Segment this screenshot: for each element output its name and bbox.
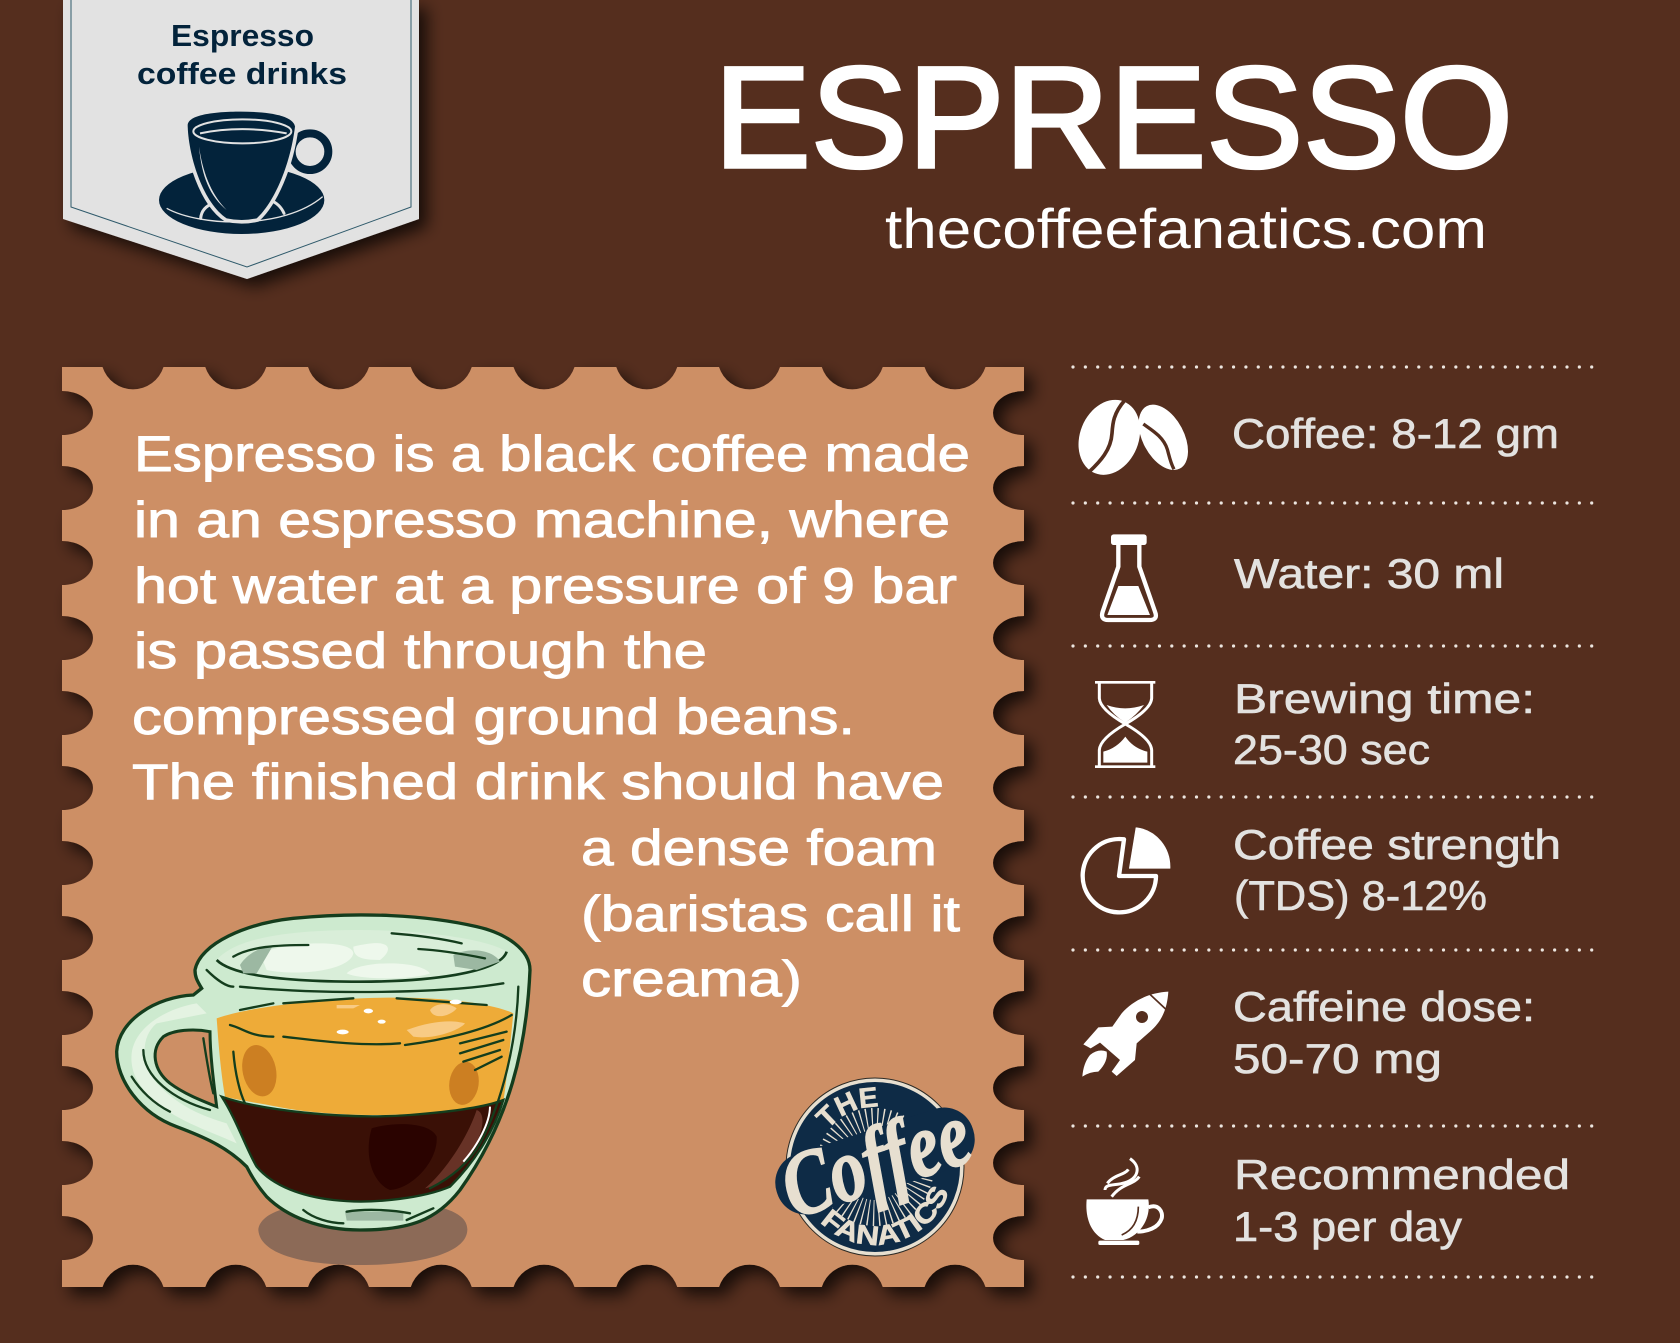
text: brewing time: 25-30 sec [1233, 726, 1430, 773]
text: coffee amount: Coffee: 8-12 gm [1232, 410, 1559, 457]
description text: hot water at a pressure of 9 bar [134, 558, 957, 614]
banner heading: Espresso [171, 18, 314, 53]
icon: flask [1102, 534, 1156, 620]
text: brewing time: Brewing time: [1234, 675, 1535, 722]
banner heading: coffee drinks [137, 56, 347, 91]
text: caffeine dose: Caffeine dose: [1233, 983, 1535, 1030]
logo: The Coffee Fanatics: Coffee [768, 1082, 982, 1238]
description text: is passed through the [134, 623, 707, 679]
icon: steaming cup [1086, 1159, 1162, 1245]
text: coffee strength: (TDS) 8-12% [1234, 872, 1487, 919]
text: recommended servings [1233, 1151, 1570, 1250]
text: brewing time [1233, 675, 1535, 773]
logo: The Coffee Fanatics [768, 1078, 982, 1256]
website subtitle: thecoffeefanatics.com [885, 197, 1487, 260]
icon: rocket [1082, 992, 1168, 1077]
text: caffeine dose: 50-70 mg [1233, 1035, 1442, 1082]
logo: The Coffee Fanatics: FANATICS [820, 1186, 948, 1246]
text: recommended servings: Recommended [1234, 1151, 1570, 1198]
icon: coffee beans [1068, 390, 1198, 484]
illustration: glass espresso cup [117, 915, 530, 1265]
description text: The finished drink should have [132, 754, 944, 810]
icon: pie chart [1083, 828, 1170, 912]
description text [132, 426, 970, 1007]
icon: hourglass [1095, 681, 1155, 768]
description text: compressed ground beans. [132, 689, 855, 745]
banner heading [137, 18, 347, 91]
text: water amount: Water: 30 ml [1234, 550, 1504, 597]
logo: The Coffee Fanatics: THE [814, 1086, 878, 1126]
title: ESPRESSO [714, 37, 1513, 198]
description text: a dense foam [581, 820, 937, 876]
description text: in an espresso machine, where [134, 492, 950, 548]
dotted dividers [1073, 367, 1597, 1277]
description text: creama) [581, 951, 802, 1007]
description text: (baristas call it [581, 886, 960, 942]
text: caffeine dose [1233, 983, 1535, 1082]
panel: stamp description [62, 366, 1040, 1304]
text: coffee strength [1233, 821, 1561, 919]
description text: Espresso is a black coffee made [134, 426, 970, 482]
text: coffee strength: Coffee strength [1233, 821, 1561, 868]
icon: cup and saucer [159, 112, 328, 234]
text: recommended servings: 1-3 per day [1233, 1203, 1462, 1250]
banner: espresso coffee drinks [63, 0, 419, 279]
